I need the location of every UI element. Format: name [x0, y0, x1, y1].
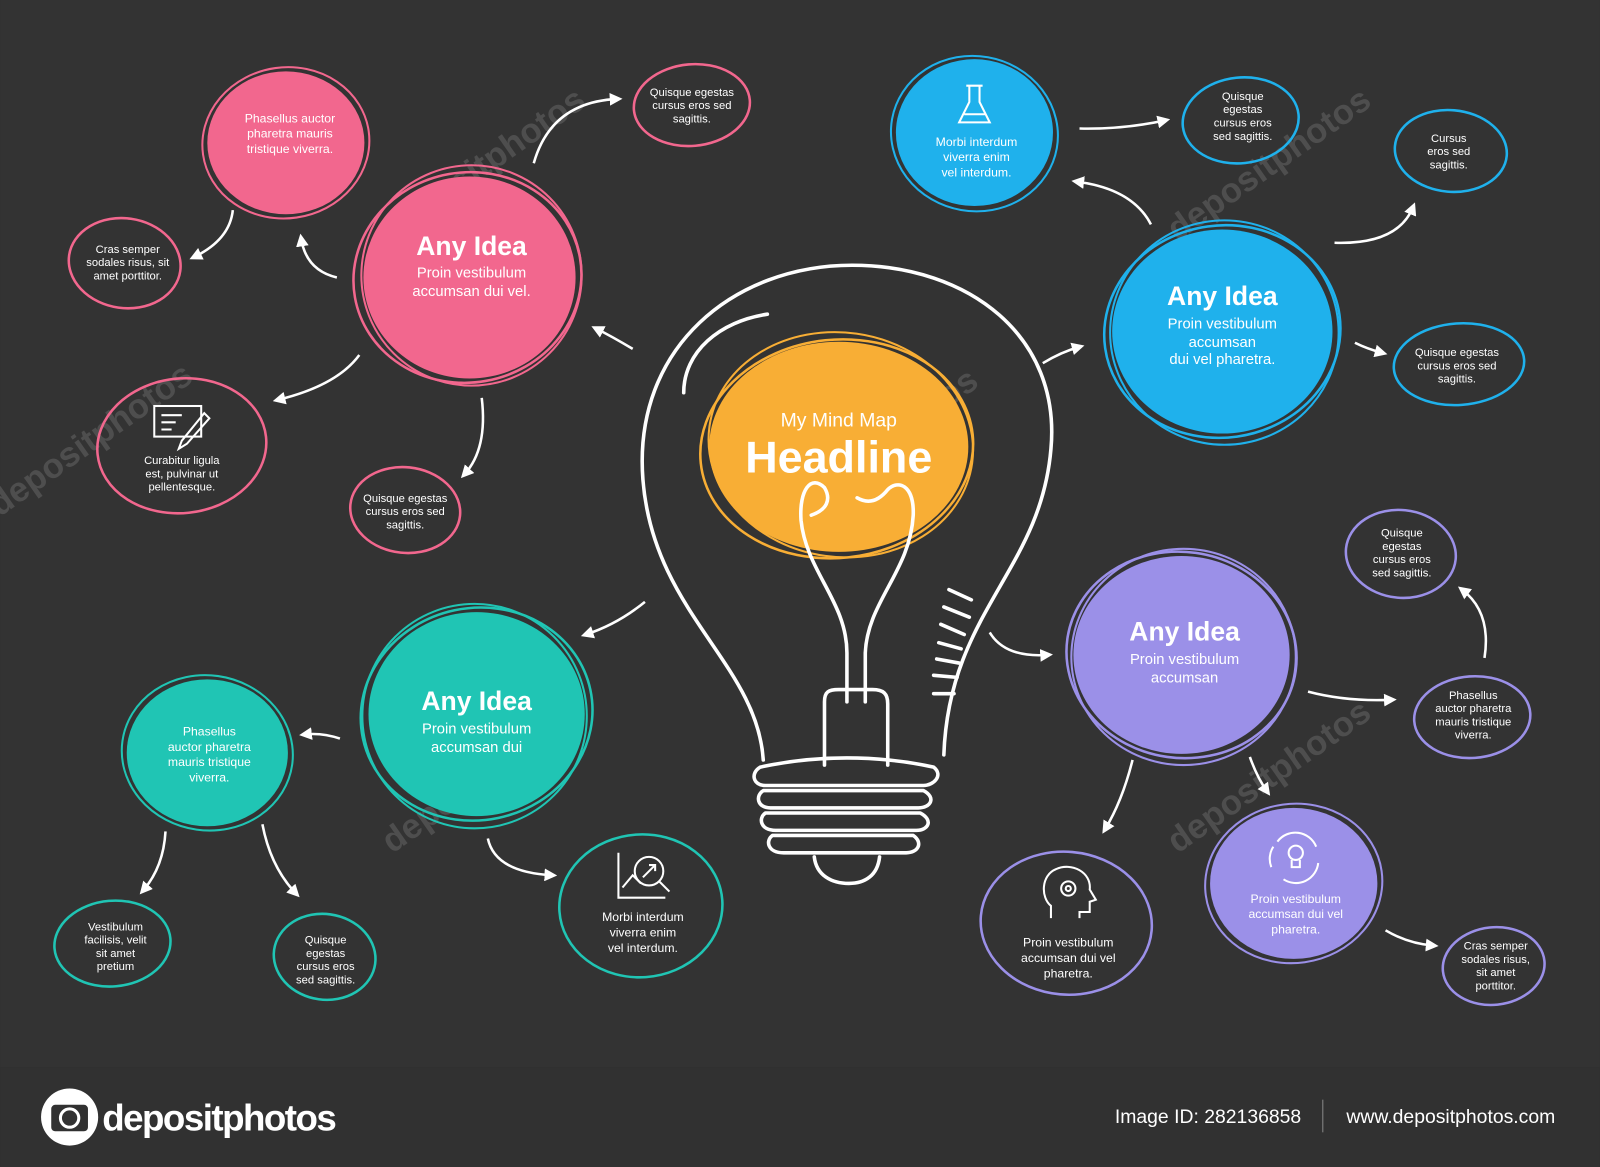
teal filled note: auctor pharetra [168, 740, 251, 754]
teal note left: pretium [97, 961, 134, 973]
purple note with head icon: accumsan dui vel [1021, 951, 1116, 965]
icon: flask [959, 86, 990, 122]
blue note bottom: sagittis. [1438, 374, 1476, 386]
purple note bottom right: Cras semper [1464, 941, 1528, 953]
purple main idea [1053, 537, 1310, 773]
watermarks: depositphotos [375, 80, 592, 248]
purple note top: sed sagittis. [1372, 567, 1431, 579]
purple note right: Phasellus [1449, 690, 1498, 702]
pink note with icon: est, pulvinar ut [145, 468, 219, 480]
teal main idea [341, 586, 612, 842]
footer image id: www.depositphotos.com [1345, 1106, 1555, 1128]
purple main idea: Proin vestibulum [1130, 652, 1239, 668]
pink note top: Quisque egestas [650, 87, 734, 99]
light bulb [642, 265, 1052, 883]
pink filled note [193, 56, 379, 229]
pink main idea: Any Idea [416, 231, 527, 261]
footer image id: Image ID: 282136858 [1115, 1106, 1301, 1128]
pink note with icon [91, 370, 273, 522]
panel: pink [63, 56, 753, 558]
purple note bottom right: porttitor. [1475, 981, 1516, 993]
purple note top: cursus eros [1373, 554, 1431, 566]
icon: note with pen [154, 406, 209, 449]
teal filled note: Phasellus [183, 724, 236, 738]
blue note right: sagittis. [1430, 159, 1468, 171]
purple filled note with bulb icon [1195, 792, 1393, 975]
blue main idea [1090, 210, 1354, 453]
teal note left: sit amet [96, 948, 136, 960]
blue note right: Cursus [1431, 133, 1467, 145]
icon: chart with magnifier [618, 853, 669, 898]
blue filled note with flask: viverra enim [943, 150, 1010, 164]
watermarks: depositphotos [1160, 80, 1378, 248]
watermarks [0, 80, 1378, 861]
center headline [689, 315, 988, 574]
blue note top: cursus eros [1214, 117, 1272, 129]
purple note right: viverra. [1455, 730, 1492, 742]
blue note bottom [1391, 319, 1527, 409]
teal main idea: accumsan dui [431, 740, 522, 756]
watermarks: depositphotos [375, 692, 592, 861]
watermarks: depositphotos [1160, 692, 1378, 861]
footer image id [1115, 1100, 1555, 1132]
teal filled note: mauris tristique [168, 755, 251, 769]
blue main idea: dui vel pharetra. [1169, 352, 1275, 368]
purple filled note with bulb icon: pharetra. [1271, 922, 1320, 936]
purple note with head icon [975, 845, 1158, 1002]
footer logo: depositphotos [102, 1097, 335, 1138]
purple note right: mauris tristique [1435, 716, 1511, 728]
blue main idea: accumsan [1189, 335, 1256, 351]
pink note top [630, 59, 753, 151]
footer logo [41, 1088, 335, 1146]
pink note left: sodales risus, sit [86, 257, 170, 269]
pink main idea: Proin vestibulum [417, 265, 526, 281]
teal note left: facilisis, velit [84, 935, 148, 947]
arrows [143, 99, 1486, 946]
blue note top: Quisque [1222, 91, 1264, 103]
blue filled note with flask [879, 43, 1070, 225]
purple note top [1341, 505, 1460, 603]
blue note right: eros sed [1427, 146, 1470, 158]
panel: purple [975, 505, 1548, 1010]
teal note middle: egestas [306, 948, 346, 960]
teal note left: Vestibulum [88, 921, 143, 933]
pink note left: Cras semper [96, 244, 160, 256]
teal main idea: Any Idea [421, 686, 532, 716]
purple note with head icon: pharetra. [1044, 966, 1093, 980]
teal note with chart icon [554, 829, 727, 983]
panel: teal [51, 586, 727, 1006]
blue note right [1391, 105, 1510, 197]
pink note with icon: pellentesque. [148, 482, 215, 494]
purple note right [1411, 672, 1533, 762]
blue note top: egestas [1223, 104, 1263, 116]
pink main idea [337, 154, 598, 401]
teal filled note: viverra. [189, 770, 229, 784]
purple note bottom right: sit amet [1476, 967, 1516, 979]
teal note middle [268, 907, 381, 1006]
pink note left: amet porttitor. [93, 271, 162, 283]
blue main idea: Proin vestibulum [1168, 316, 1277, 332]
pink note top: cursus eros sed [652, 100, 731, 112]
icon: head with gear [1044, 867, 1096, 918]
blue filled note with flask: Morbi interdum [936, 135, 1017, 149]
purple main idea: Any Idea [1129, 617, 1240, 647]
blue filled note with flask: vel interdum. [941, 165, 1012, 179]
purple main idea: accumsan [1151, 670, 1218, 686]
purple note top: egestas [1382, 541, 1422, 553]
center headline: My Mind Map [781, 409, 897, 431]
pink note bottom: cursus eros sed [366, 506, 445, 518]
pink note bottom: Quisque egestas [363, 493, 448, 505]
purple note bottom right [1439, 922, 1548, 1010]
blue note top [1178, 72, 1303, 169]
teal note left [51, 896, 174, 991]
center headline: Headline [745, 431, 932, 482]
panel: blue [879, 43, 1527, 453]
pink note bottom [346, 462, 464, 558]
purple filled note with bulb icon: Proin vestibulum [1251, 892, 1341, 906]
purple note bottom right: sodales risus, [1461, 954, 1530, 966]
icon: cycle bulb [1270, 833, 1318, 883]
purple note top: Quisque [1381, 528, 1423, 540]
pink note bottom: sagittis. [386, 519, 424, 531]
teal note middle: cursus eros [297, 961, 355, 973]
purple note with head icon: Proin vestibulum [1023, 936, 1114, 950]
pink note left [63, 211, 186, 315]
teal note with chart icon: vel interdum. [608, 941, 678, 955]
blue note bottom: Quisque egestas [1415, 347, 1499, 359]
teal note middle: sed sagittis. [296, 974, 355, 986]
pink filled note: tristique viverra. [247, 142, 333, 156]
blue note top: sed sagittis. [1213, 131, 1272, 143]
teal main idea: Proin vestibulum [422, 721, 531, 737]
pink filled note: pharetra mauris [247, 127, 333, 141]
blue main idea: Any Idea [1167, 281, 1278, 311]
teal note with chart icon: viverra enim [610, 925, 676, 939]
watermarks: depositphotos [768, 361, 985, 529]
teal filled note [112, 664, 303, 842]
teal note with chart icon: Morbi interdum [602, 910, 684, 924]
pink note with icon: Curabitur ligula [144, 455, 220, 467]
teal note middle: Quisque [305, 935, 347, 947]
pink main idea: accumsan dui vel. [412, 284, 531, 300]
pink filled note: Phasellus auctor [245, 111, 335, 125]
blue note bottom: cursus eros sed [1417, 360, 1497, 372]
pink note top: sagittis. [673, 113, 711, 125]
purple filled note with bulb icon: accumsan dui vel [1249, 907, 1343, 921]
purple note right: auctor pharetra [1435, 703, 1512, 715]
